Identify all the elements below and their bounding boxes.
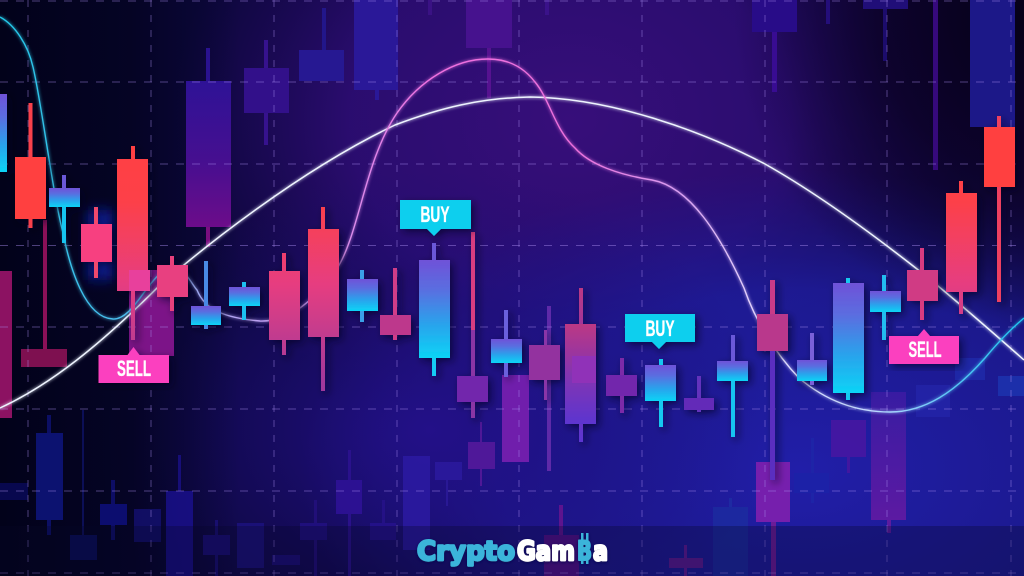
candle: magenta 21	[757, 280, 788, 480]
bottom footer band	[0, 526, 1024, 576]
white moving average curve	[0, 97, 1024, 408]
label: sell right	[889, 329, 959, 364]
candle: cool edge	[0, 94, 7, 172]
candle: purple 19	[684, 376, 714, 412]
logo: CryptoGamBa: a	[593, 536, 608, 567]
label: buy right	[625, 314, 695, 349]
background candles: lower left magenta	[0, 220, 551, 471]
candle: faded tall 16	[565, 288, 596, 442]
candle: purple 13	[457, 232, 488, 418]
label: buy centre: BUY	[420, 202, 450, 227]
candle: blue 6	[191, 261, 221, 329]
background candles: top row	[186, 0, 1015, 247]
candle: red 9	[308, 207, 339, 391]
foreground candlesticks	[0, 94, 1015, 480]
candle: blue 22	[797, 333, 827, 385]
logo: CryptoGamBa	[417, 533, 608, 567]
candle: red 27	[984, 116, 1015, 302]
logo: CryptoGamBa: Crypto	[417, 536, 515, 567]
candle: blue 20	[717, 335, 748, 437]
label: buy right: BUY	[646, 316, 675, 341]
logo: CryptoGamBa: B	[577, 536, 592, 567]
candle: purple 17	[606, 358, 637, 413]
label: sell left	[98, 347, 169, 383]
label: sell right: SELL	[908, 337, 942, 362]
candle: blue tall 23	[833, 278, 864, 400]
candle: blue 24	[870, 275, 901, 340]
candle: blue 18	[645, 359, 676, 427]
candle: red tall 4	[117, 146, 148, 340]
candle: pink 3	[81, 207, 112, 278]
candle: blue 2	[49, 175, 80, 243]
background candles: bottom row	[0, 358, 1024, 576]
candle: blue 10	[347, 270, 378, 322]
candle: faded 15	[529, 330, 560, 400]
candle: red 26	[946, 181, 977, 314]
logo: CryptoGamBa: Gam	[517, 536, 575, 567]
candle: blue tall 12	[419, 243, 450, 376]
candle: pink 25	[907, 248, 938, 320]
candle: red 8	[269, 253, 300, 355]
overlap highlight	[129, 270, 150, 291]
candle: pink 5	[157, 256, 188, 311]
label: buy centre	[400, 200, 471, 236]
candle: blue 7	[229, 282, 260, 320]
label: sell left: SELL	[117, 356, 151, 381]
candle: blue 14	[491, 310, 522, 377]
multicolour moving average curve	[0, 17, 1024, 412]
candle: magenta 11	[380, 268, 411, 340]
candle: red 1	[15, 103, 46, 228]
